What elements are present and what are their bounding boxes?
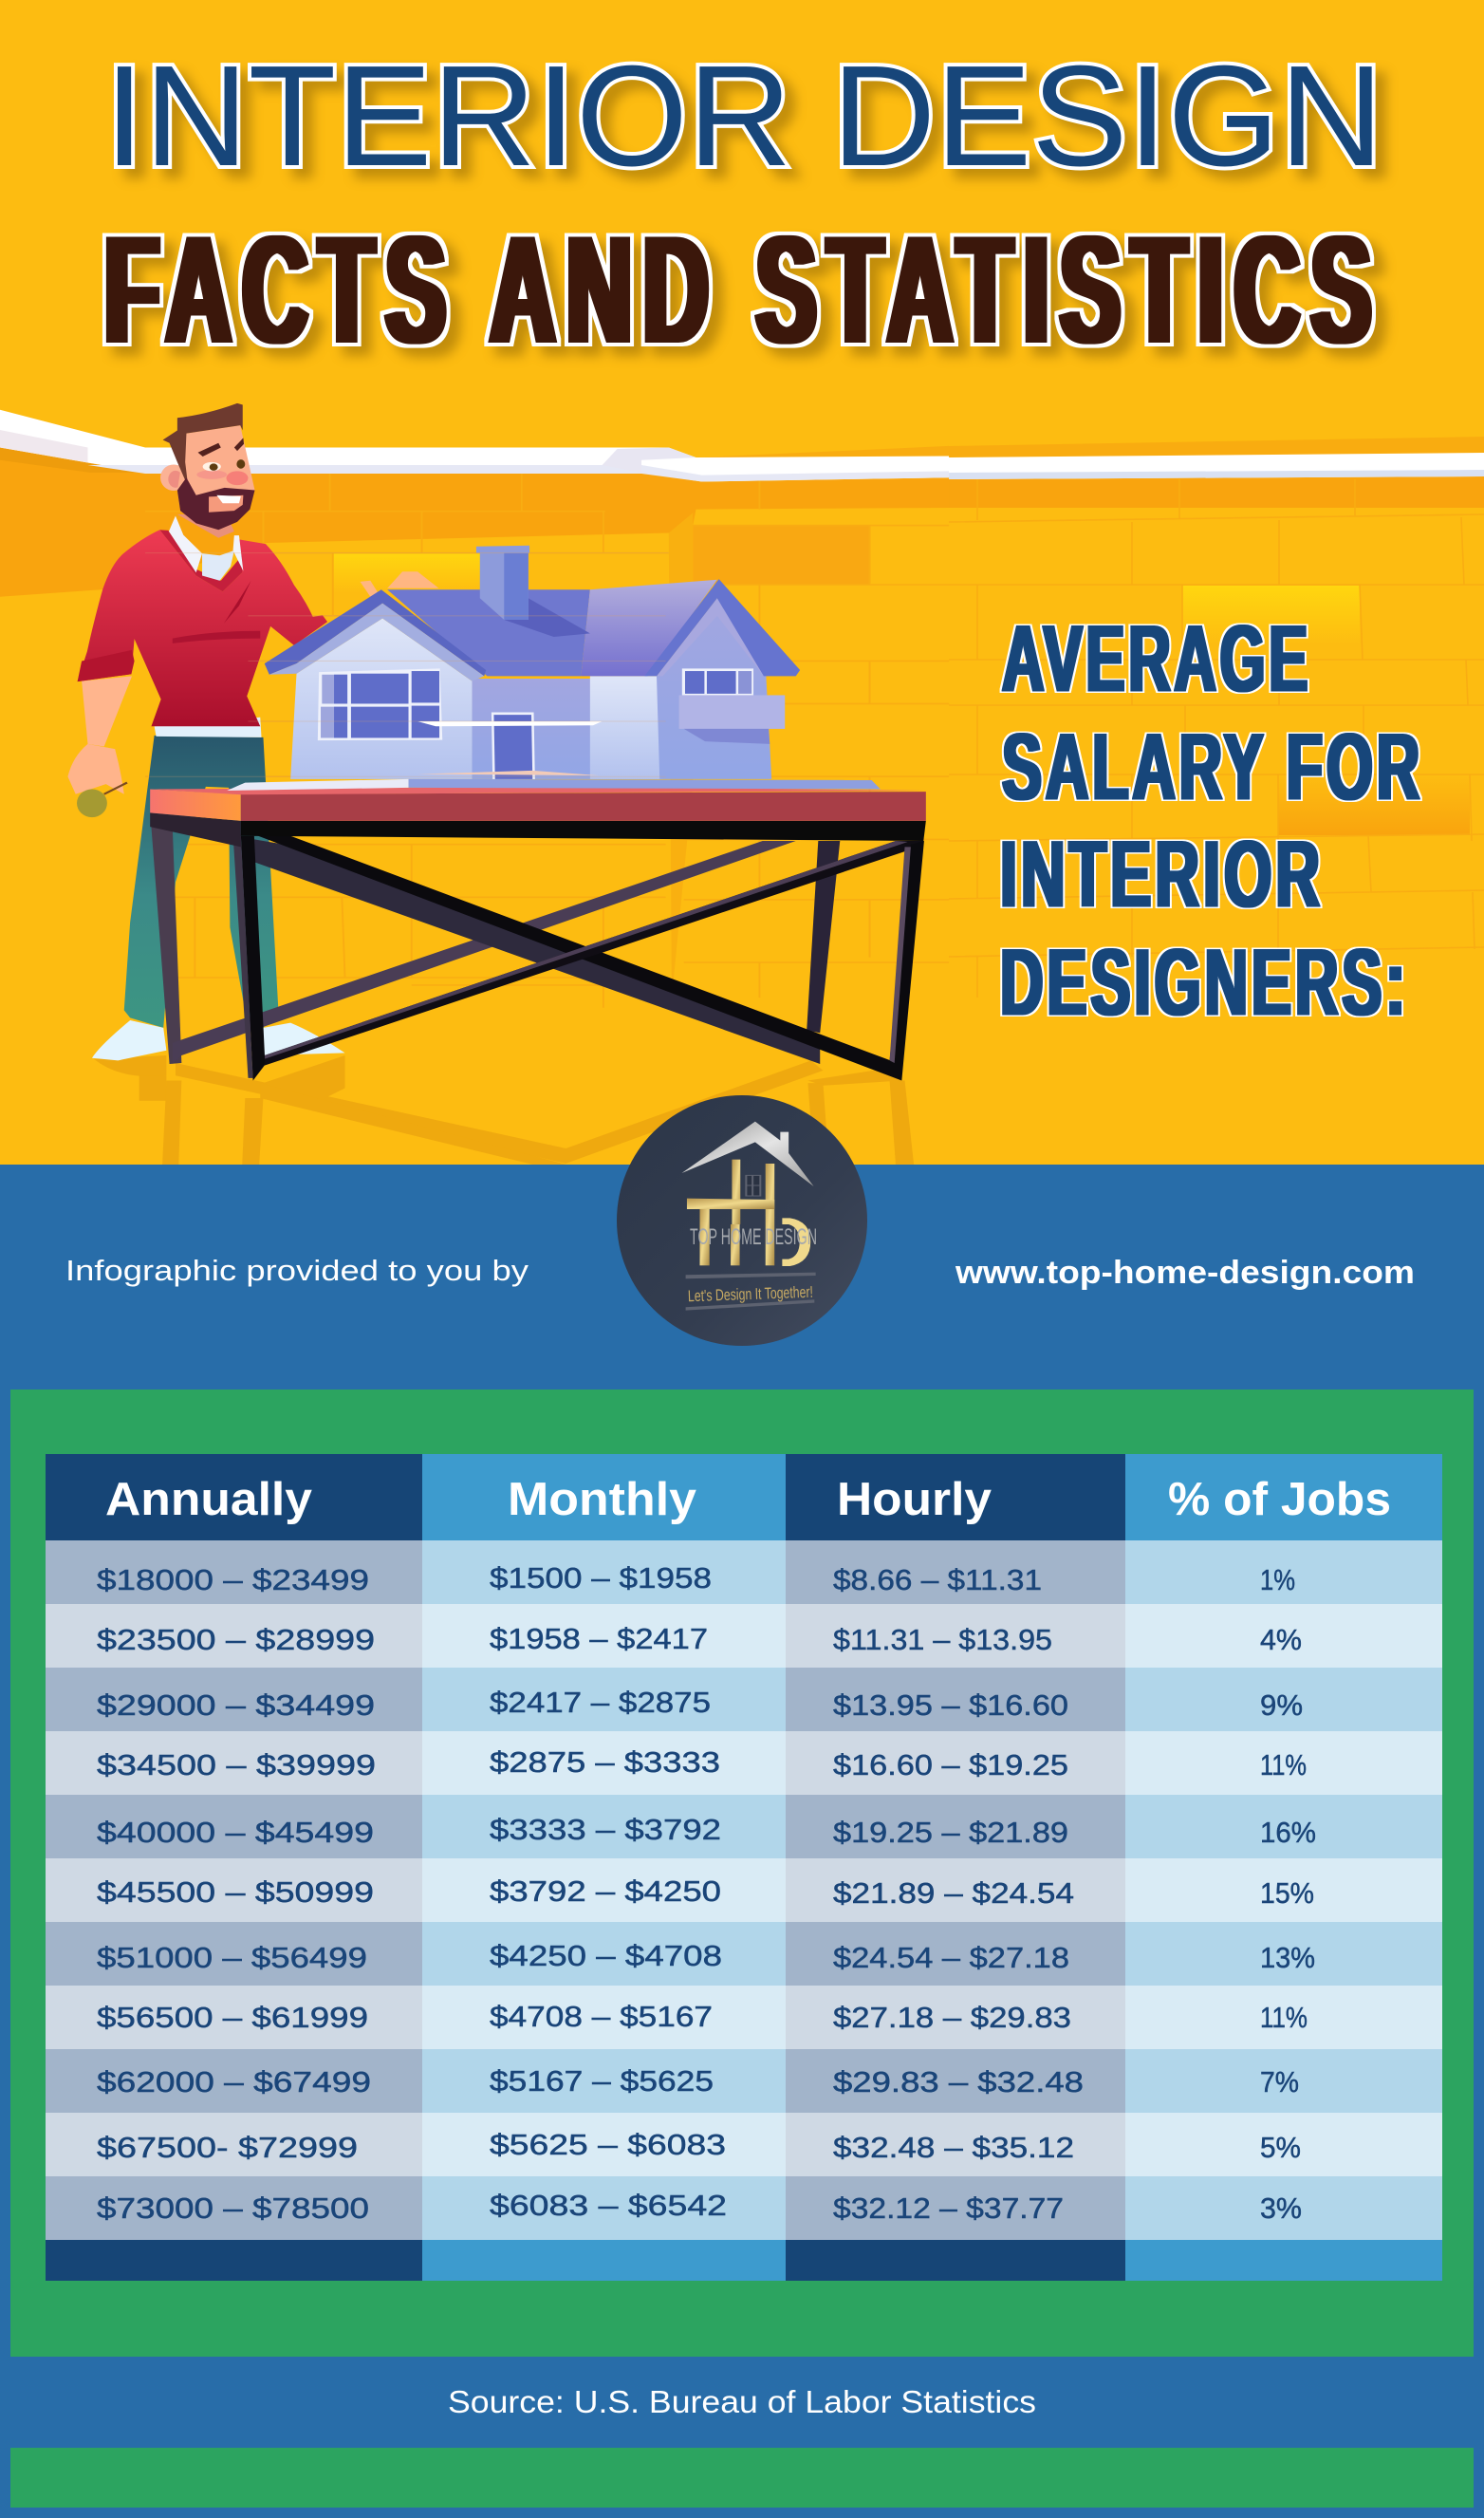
annually column: $67500- $72999	[97, 2131, 358, 2164]
monthly column	[490, 1561, 727, 2222]
hourly column	[833, 1563, 1084, 2225]
illustration: man and house model on table	[67, 403, 926, 1081]
percent of jobs column: 16%	[1260, 1816, 1316, 1849]
table headers: Monthly	[508, 1474, 696, 1525]
monthly column: $2417 – $2875	[490, 1686, 711, 1719]
logo badge: Let's Design It Together!	[688, 1283, 813, 1305]
heading: average salary for interior designers	[1000, 606, 1423, 1035]
monthly column: $2875 – $3333	[490, 1745, 720, 1779]
green panel	[10, 1390, 1474, 2357]
house model	[227, 546, 881, 791]
percent of jobs column: 13%	[1260, 1941, 1315, 1974]
annually column: $56500 – $61999	[97, 2001, 368, 2034]
percent of jobs column: 1%	[1260, 1563, 1295, 1596]
percent of jobs column: 4%	[1260, 1623, 1302, 1656]
percent of jobs column: 9%	[1260, 1688, 1303, 1722]
annually column: $40000 – $45499	[97, 1816, 374, 1849]
percent of jobs column: 11%	[1260, 2001, 1308, 2034]
monthly column: $6083 – $6542	[490, 2189, 727, 2222]
annually column	[97, 1563, 376, 2225]
table headers	[105, 1474, 1391, 1525]
percent of jobs column: 11%	[1260, 1748, 1307, 1781]
source line: Source: U.S. Bureau of Labor Statistics	[448, 2384, 1036, 2419]
monthly column: $3333 – $3792	[490, 1813, 721, 1846]
monthly column: $1958 – $2417	[490, 1622, 708, 1655]
table frame and top	[150, 787, 926, 1081]
hourly column: $27.18 – $29.83	[833, 2001, 1071, 2034]
monthly column: $5167 – $5625	[490, 2064, 714, 2098]
monthly column: $3792 – $4250	[490, 1875, 721, 1908]
table headers: Annually	[105, 1474, 312, 1525]
hourly column: $24.54 – $27.18	[833, 1941, 1069, 1974]
monthly column: $5625 – $6083	[490, 2128, 726, 2161]
table column and row fills	[46, 1454, 1442, 2281]
percent of jobs column: 15%	[1260, 1876, 1314, 1910]
hourly column: $16.60 – $19.25	[833, 1748, 1068, 1781]
wall and ceiling scene	[0, 410, 1484, 1008]
annually column: $73000 – $78500	[97, 2192, 369, 2225]
table headers: Hourly	[837, 1474, 992, 1525]
percent of jobs column	[1260, 1563, 1316, 2225]
annually column: $45500 – $50999	[97, 1875, 374, 1909]
salary table	[46, 1454, 1442, 2281]
logo badge	[617, 1095, 867, 1346]
percent of jobs column: 3%	[1260, 2192, 1302, 2225]
website url: www.top-home-design.com	[955, 1255, 1415, 1291]
hourly column: $19.25 – $21.89	[833, 1816, 1068, 1849]
hourly column: $29.83 – $32.48	[833, 2065, 1084, 2098]
monthly column: $1500 – $1958	[490, 1561, 712, 1595]
percent of jobs column: 7%	[1260, 2065, 1299, 2098]
man figure	[67, 403, 438, 1060]
title: interior design: INTERIOR DESIGN	[104, 35, 1383, 196]
annually column: $23500 – $28999	[97, 1623, 375, 1656]
faint wall lines over illustration	[145, 553, 669, 776]
heading: average salary for interior designers: INTERIOR	[1000, 821, 1324, 926]
annually column: $18000 – $23499	[97, 1563, 369, 1596]
monthly column: $4250 – $4708	[490, 1939, 722, 1972]
hourly column: $8.66 – $11.31	[833, 1563, 1042, 1596]
blue band	[0, 1165, 1484, 2518]
hourly column: $21.89 – $24.54	[833, 1876, 1074, 1910]
monthly column: $4708 – $5167	[490, 2000, 713, 2033]
annually column: $29000 – $34499	[97, 1688, 375, 1722]
hourly column: $32.48 – $35.12	[833, 2131, 1074, 2164]
annually column: $51000 – $56499	[97, 1941, 367, 1974]
bottom green bar	[10, 2448, 1474, 2508]
table headers: % of Jobs	[1168, 1474, 1391, 1525]
hourly column: $32.12 – $37.77	[833, 2192, 1064, 2225]
annually column: $34500 – $39999	[97, 1748, 376, 1781]
hourly column: $13.95 – $16.60	[833, 1688, 1068, 1722]
percent of jobs column: 5%	[1260, 2131, 1301, 2164]
annually column: $62000 – $67499	[97, 2065, 371, 2098]
yellow header background	[0, 0, 1484, 1165]
floor shadows of table and man	[94, 1055, 914, 1167]
logo badge: TOP HOME DESIGN	[690, 1224, 817, 1250]
provided by text: Infographic provided to you by	[65, 1254, 529, 1287]
hourly column: $11.31 – $13.95	[833, 1623, 1052, 1656]
